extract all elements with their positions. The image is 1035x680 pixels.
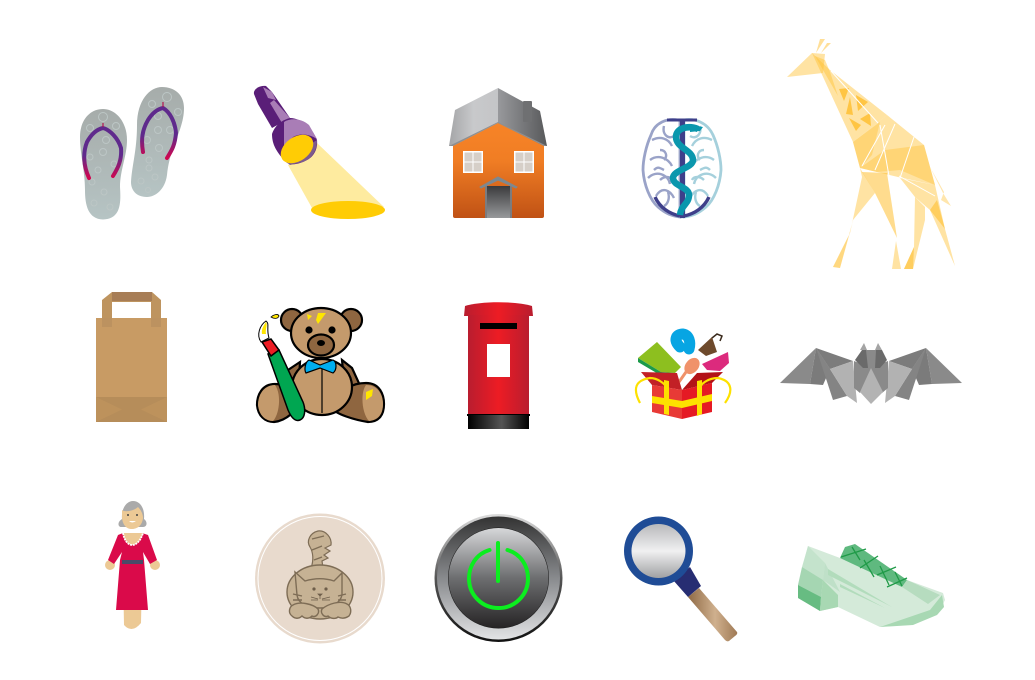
- icon: gift box with items: [636, 334, 730, 419]
- icon: origami bat: [780, 343, 962, 404]
- icon: red post box: [464, 302, 533, 429]
- icon: flip-flops: [80, 87, 184, 220]
- icon: flashlight: [254, 86, 385, 219]
- icon: woman in red dress: [105, 501, 160, 629]
- icon: origami giraffe: [787, 39, 955, 269]
- icon: power button: [434, 514, 562, 642]
- icon: origami shoe: [798, 544, 945, 627]
- icon: paper bag: [96, 292, 167, 422]
- icon: brain with serpent staff: [643, 119, 721, 218]
- icon: magnifying glass: [624, 516, 737, 641]
- icon: cat in circle: [255, 514, 385, 644]
- icon: house: [449, 88, 547, 218]
- icon: teddy bear with paint brush: [257, 308, 384, 422]
